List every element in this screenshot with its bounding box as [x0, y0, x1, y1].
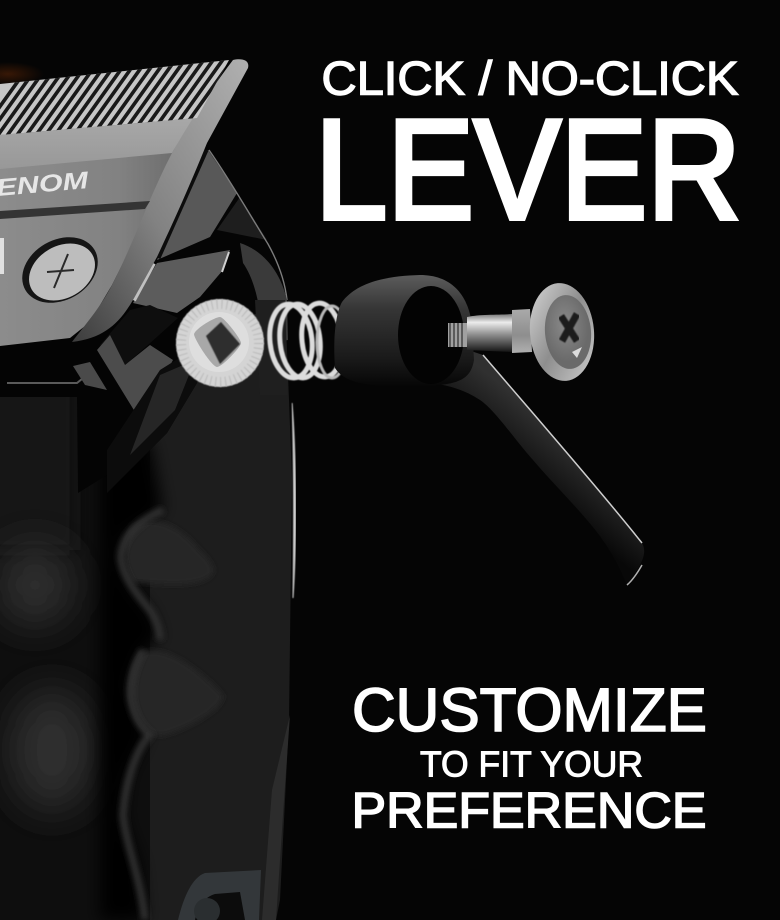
spring — [266, 301, 347, 380]
tagline: PREFERENCE — [352, 782, 706, 838]
clipper blade — [0, 55, 248, 346]
blade teeth — [0, 60, 229, 135]
knob cylinder — [334, 275, 474, 386]
dark housing and side arm — [0, 150, 288, 493]
slot — [0, 201, 150, 219]
shoulder screw — [448, 280, 598, 384]
arm crescent — [240, 243, 288, 345]
side blade shape — [107, 345, 200, 493]
clipper body — [0, 300, 296, 920]
bevel edge — [72, 59, 248, 342]
lever arm — [433, 350, 644, 585]
grey panel — [157, 150, 237, 260]
tagline — [352, 676, 707, 838]
tagline: CUSTOMIZE — [352, 676, 707, 744]
blade screw — [10, 224, 110, 316]
tagline: TO FIT YOUR — [420, 744, 643, 784]
lower bracket with screw — [178, 870, 261, 920]
clipper illustration — [0, 55, 296, 920]
body grip bulge upper — [125, 521, 213, 584]
title: CLICK / NO-CLICK — [322, 52, 738, 104]
lower panel — [133, 250, 230, 313]
title: LEVER — [315, 90, 741, 250]
warm glow behind blade — [0, 62, 44, 86]
body grip contour — [121, 510, 163, 920]
left slot — [0, 238, 4, 274]
body grip bulge lower — [130, 651, 223, 736]
band under teeth — [0, 118, 197, 169]
toothed washer — [176, 299, 264, 387]
plate base — [0, 118, 197, 346]
body right edge highlight — [292, 403, 296, 598]
exploded lever assembly — [176, 275, 644, 585]
